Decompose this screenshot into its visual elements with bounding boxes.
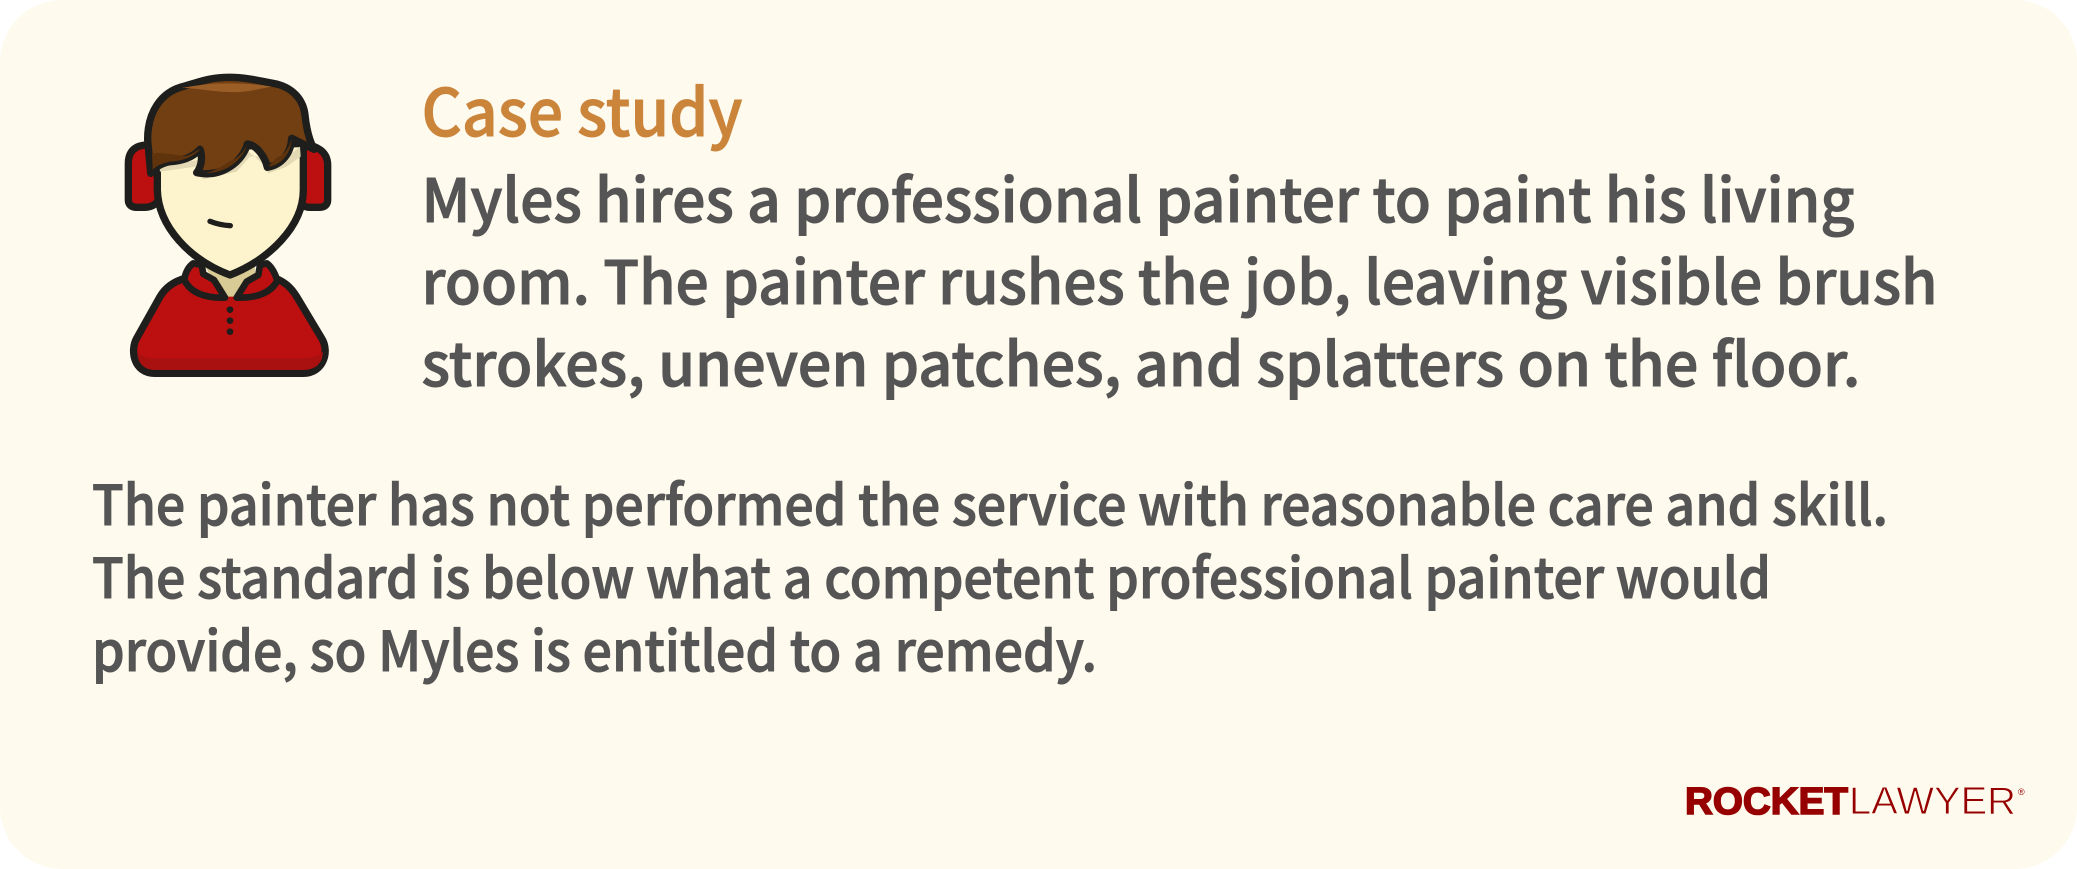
icon part: neck	[205, 267, 255, 297]
logo: Rocket Lawyer: LAWYER	[1849, 780, 2016, 823]
icon part: hair lower shade	[152, 138, 292, 173]
icon part: right ear protector	[300, 145, 328, 207]
logo: Rocket Lawyer: ®	[2018, 787, 2025, 797]
icon part: collar	[184, 263, 277, 298]
text block: scenario: strokes, uneven patches, and splatters on the floor.	[422, 317, 1860, 404]
icon part: left ear protector	[128, 145, 158, 207]
text block: conclusion: The standard is below what a competent professional painter would	[92, 534, 1771, 614]
logo: Rocket Lawyer	[1685, 780, 2025, 823]
text block: scenario	[422, 153, 1938, 404]
icon part: shirt body	[134, 278, 325, 373]
icon part: mouth	[210, 221, 230, 226]
icon part: hair shadow on face	[159, 147, 301, 179]
icon part: hair highlight	[182, 83, 272, 92]
logo: Rocket Lawyer: ROCKET	[1685, 781, 1848, 823]
icon part: face	[157, 143, 303, 275]
heading: case study: Case study	[422, 61, 742, 155]
text block: conclusion: The painter has not performed the service with reasonable care and skill.	[92, 461, 1888, 541]
icon part: hair	[148, 77, 314, 174]
text block: scenario: Myles hires a professional painter to paint his living	[422, 153, 1854, 240]
text block: scenario: room. The painter rushes the job, leaving visible brush	[422, 235, 1938, 322]
icon part: shirt buttons	[227, 306, 233, 335]
text block: conclusion: provide, so Myles is entitled to a remedy.	[92, 607, 1097, 687]
text block: conclusion	[92, 461, 1888, 687]
icon: man with red ear protectors and red shirt	[128, 77, 328, 373]
icon part: shirt hem shadow	[138, 352, 323, 370]
